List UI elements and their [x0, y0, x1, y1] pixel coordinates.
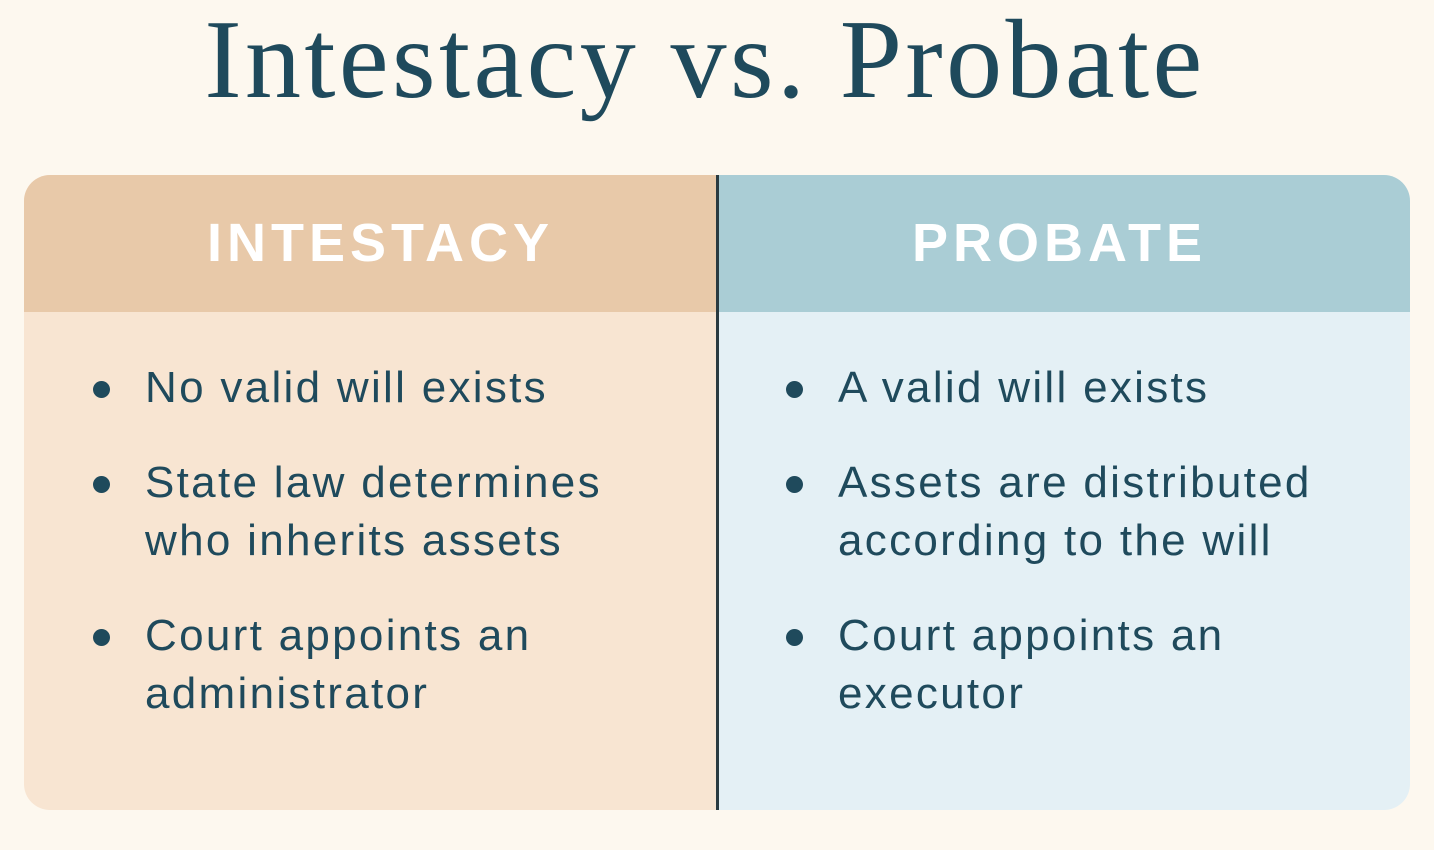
title: Intestacy vs. Probate [204, 0, 1206, 122]
header: intestacy: INTESTACY [207, 213, 554, 273]
bullet: state law [145, 454, 602, 570]
panel: intestacy [24, 175, 717, 810]
header: probate [719, 175, 1410, 312]
bullet: no valid will: No valid will exists [145, 363, 548, 412]
bullet: valid will: A valid will exists [838, 363, 1209, 412]
bullet: state law: State law determines [145, 458, 602, 507]
bullet: administrator [145, 607, 531, 723]
panel: comparison [24, 175, 1410, 810]
panel: probate [719, 175, 1410, 810]
bullet: assets distributed: according to the will [838, 516, 1273, 565]
bullet: administrator: administrator [145, 669, 429, 718]
bullet: executor [838, 607, 1224, 723]
bullet: state law: who inherits assets [145, 516, 563, 565]
header: probate: PROBATE [912, 213, 1207, 273]
bullet: administrator: Court appoints an [145, 611, 531, 660]
bullet: assets distributed: Assets are distributed [838, 458, 1312, 507]
bullet: executor: executor [838, 669, 1025, 718]
header: intestacy [24, 175, 717, 312]
bullet: executor: Court appoints an [838, 611, 1224, 660]
bullet: assets distributed [838, 454, 1312, 570]
